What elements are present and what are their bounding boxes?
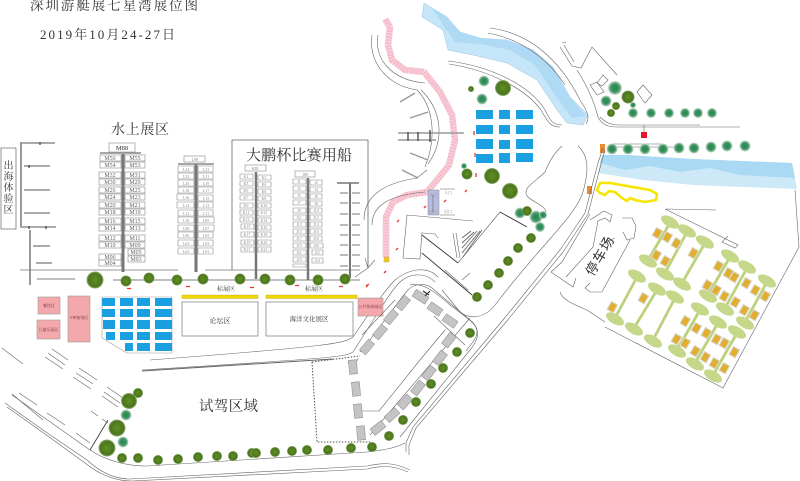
dock J: J24 bbox=[314, 258, 320, 263]
dock M: M25 bbox=[129, 188, 141, 194]
experience zone label box bbox=[1, 148, 16, 229]
dock L: L13 bbox=[203, 203, 209, 208]
dock M: M11 bbox=[129, 236, 141, 242]
dock J: J4 bbox=[314, 187, 318, 192]
diagonal tree row bbox=[384, 328, 475, 441]
blue booth grid bbox=[102, 297, 172, 353]
pink zones bbox=[37, 296, 383, 342]
trees: top cluster bbox=[468, 76, 511, 104]
orange gate marker bbox=[587, 186, 592, 194]
dock J: J5 bbox=[297, 193, 301, 198]
dock J: J23 bbox=[296, 257, 302, 262]
top booths bbox=[476, 110, 533, 163]
dock J: J18 bbox=[313, 236, 319, 241]
racing boats frame bbox=[232, 140, 368, 270]
dock M: M24 bbox=[104, 195, 116, 201]
dock M: M88 bbox=[116, 145, 128, 152]
dock M: M18 bbox=[104, 210, 116, 216]
dock M: M04 bbox=[104, 261, 116, 267]
dock L bbox=[177, 156, 214, 272]
dock J: J11 bbox=[296, 215, 302, 220]
dock M: M06 bbox=[104, 255, 116, 261]
dock M: M31 bbox=[129, 173, 141, 179]
trees: right cluster bbox=[600, 81, 717, 118]
pink zones: VIP接待区 bbox=[70, 314, 88, 320]
dock J: J9 bbox=[297, 208, 301, 213]
water exhibition heading: 水上展区 bbox=[111, 121, 169, 138]
dock K: K13 bbox=[243, 217, 249, 222]
red gate marker bbox=[641, 132, 647, 138]
experience zone label box: 体 bbox=[4, 181, 14, 194]
dock L: L23 bbox=[203, 167, 209, 172]
dock J: J22 bbox=[314, 250, 320, 255]
dock J: J7 bbox=[297, 200, 301, 205]
dock J: J12 bbox=[313, 215, 319, 220]
central pier bbox=[364, 35, 464, 225]
dock K: K16 bbox=[261, 225, 267, 230]
dock L: L24 bbox=[183, 167, 189, 172]
water: upper channel bbox=[422, 3, 588, 125]
water: right channel bbox=[598, 155, 797, 189]
dock K: K7 bbox=[244, 195, 248, 200]
dock L: L88 bbox=[192, 157, 198, 162]
dock K: K19 bbox=[244, 240, 250, 245]
yellow booth strips bbox=[182, 295, 357, 298]
entrance panel: 入口 bbox=[429, 191, 437, 197]
marine culture zone bbox=[266, 302, 353, 336]
racing boats heading: 大鹏杯比赛用船 bbox=[246, 147, 352, 164]
dock M: M05 bbox=[130, 250, 142, 256]
dock M: M56 bbox=[104, 156, 116, 162]
dock L: L05 bbox=[203, 233, 209, 238]
experience zone label box: 出 bbox=[4, 159, 14, 172]
standard zone labels: 标展区 bbox=[305, 285, 323, 293]
dock L: L16 bbox=[183, 195, 189, 200]
dock M: M21 bbox=[129, 203, 141, 209]
dock L: L01 bbox=[203, 249, 209, 254]
experience zone label box: 海 bbox=[4, 170, 14, 183]
dock L: L11 bbox=[203, 211, 209, 216]
dock J: J16 bbox=[313, 229, 319, 234]
dock K: K20 bbox=[261, 240, 267, 245]
dock M: M23 bbox=[129, 195, 141, 201]
entrance panel bbox=[428, 189, 455, 215]
small gate icon bbox=[423, 291, 430, 296]
pink zones: 儿童乐园区 bbox=[38, 326, 58, 332]
dock K: K22 bbox=[261, 247, 267, 252]
dock K: K9 bbox=[244, 203, 248, 208]
date: 2019年10月24-27日 bbox=[40, 27, 175, 42]
dock L: L18 bbox=[183, 188, 189, 193]
forum zone bbox=[182, 302, 258, 336]
dock M: M55 bbox=[129, 156, 141, 162]
yellow track bbox=[597, 183, 657, 202]
dock M: M19 bbox=[129, 210, 141, 216]
dock L: L14 bbox=[183, 203, 189, 208]
dock J: J17 bbox=[296, 236, 302, 241]
dock K: K18 bbox=[261, 232, 267, 237]
dock L: L06 bbox=[183, 233, 189, 238]
dock J: J6 bbox=[314, 194, 318, 199]
event building bbox=[403, 212, 527, 295]
dock M: M26 bbox=[104, 188, 116, 194]
dock K: K15 bbox=[244, 224, 250, 229]
villa road bbox=[348, 284, 478, 437]
red markers bbox=[127, 131, 476, 288]
dock M: M16 bbox=[104, 219, 116, 225]
dock K: K88 bbox=[252, 166, 258, 171]
dock J: J13 bbox=[296, 222, 302, 227]
dock K bbox=[240, 165, 271, 279]
dock L: L04 bbox=[183, 241, 189, 246]
dock M: M09 bbox=[129, 243, 141, 249]
entrance panel: 出口 bbox=[444, 208, 452, 214]
villas bbox=[348, 289, 458, 440]
dock K: K1 bbox=[244, 174, 248, 179]
dock L: L22 bbox=[183, 174, 189, 179]
dock K: K11 bbox=[243, 210, 249, 215]
dock K: K4 bbox=[262, 182, 266, 187]
dock J: J1 bbox=[297, 179, 301, 184]
dock L: L02 bbox=[183, 249, 189, 254]
dock L: L17 bbox=[203, 188, 209, 193]
dock K: K12 bbox=[261, 210, 267, 215]
dock J: J19 bbox=[296, 243, 302, 248]
bottom tree row bbox=[98, 388, 377, 465]
dock J: J21 bbox=[296, 250, 302, 255]
dock K: K6 bbox=[262, 189, 266, 194]
pink walkway bbox=[385, 19, 455, 257]
dock J: J15 bbox=[296, 229, 302, 234]
pink zones: 公共休闲展区 bbox=[358, 303, 382, 309]
orange gate marker bbox=[600, 144, 605, 153]
dock L: L08 bbox=[183, 226, 189, 231]
dock K: K10 bbox=[261, 203, 267, 208]
dock J: J20 bbox=[313, 243, 319, 248]
promenade trees bbox=[86, 272, 350, 288]
experience zone label box: 区 bbox=[4, 204, 14, 216]
dock M: M10 bbox=[104, 243, 116, 249]
promenade lines bbox=[20, 270, 360, 280]
entrance panel: 出口 bbox=[429, 208, 437, 214]
entrance panel: 人口 bbox=[444, 189, 452, 195]
test-drive dotted boundary bbox=[312, 356, 370, 442]
dock M: M54 bbox=[104, 163, 116, 169]
dock L: L03 bbox=[203, 241, 209, 246]
dock M: M03 bbox=[130, 257, 142, 263]
dock K: K21 bbox=[244, 247, 250, 252]
dock L: L07 bbox=[203, 226, 209, 231]
dock L: L15 bbox=[203, 196, 209, 201]
left dock bbox=[20, 142, 56, 285]
dock J: J3 bbox=[297, 186, 301, 191]
dock L: L09 bbox=[203, 218, 209, 223]
dock L: L20 bbox=[183, 181, 189, 186]
dock L: L19 bbox=[203, 181, 209, 186]
dock M: M15 bbox=[129, 219, 141, 225]
parked cars bbox=[607, 228, 771, 374]
dock L: L12 bbox=[183, 211, 189, 216]
dock M: M32 bbox=[104, 173, 116, 179]
dock J bbox=[293, 171, 323, 280]
dock M bbox=[99, 143, 145, 272]
dock M: M13 bbox=[129, 226, 141, 232]
parking bars bbox=[604, 213, 778, 385]
dock J: J10 bbox=[313, 208, 319, 213]
dock K: K17 bbox=[244, 232, 250, 237]
dock J: J14 bbox=[313, 222, 319, 227]
forum zone: 论坛区 bbox=[210, 316, 230, 325]
dock M: M20 bbox=[104, 203, 116, 209]
dock K: K2 bbox=[262, 175, 266, 180]
yellow marker bbox=[384, 257, 389, 262]
parking label: 停车场 bbox=[582, 233, 617, 278]
standard zone labels: 标展区 bbox=[217, 285, 235, 293]
experience zone label box: 验 bbox=[4, 192, 14, 205]
dock K: K8 bbox=[262, 196, 266, 201]
dock M: M14 bbox=[104, 226, 116, 232]
dock J: J88 bbox=[302, 172, 308, 177]
marine culture zone: 海洋文化展区 bbox=[290, 314, 329, 323]
dock K: K14 bbox=[261, 218, 267, 223]
building-side tree row bbox=[461, 163, 547, 302]
parking lot outline bbox=[551, 190, 799, 388]
dock K: K3 bbox=[244, 181, 248, 186]
dock M: M29 bbox=[129, 180, 141, 186]
standard zone labels bbox=[217, 285, 323, 293]
main road bbox=[142, 146, 605, 455]
dock K: K5 bbox=[244, 188, 248, 193]
dock M: M30 bbox=[104, 180, 116, 186]
dock J: J2 bbox=[314, 180, 318, 185]
dock J: J8 bbox=[314, 201, 318, 206]
test-drive heading: 试驾区域 bbox=[199, 398, 258, 415]
dock L: L21 bbox=[203, 174, 209, 179]
dock M: M12 bbox=[104, 236, 116, 242]
bottom road bbox=[5, 395, 410, 481]
crosswalk stripes bbox=[2, 348, 123, 443]
road: curve around upper water bbox=[448, 28, 740, 147]
trees: riverside row bbox=[606, 140, 750, 154]
dock L: L10 bbox=[183, 218, 189, 223]
dock I bbox=[337, 183, 375, 278]
pink zones: 餐饮区 bbox=[43, 302, 55, 308]
dock M: M53 bbox=[129, 163, 141, 169]
